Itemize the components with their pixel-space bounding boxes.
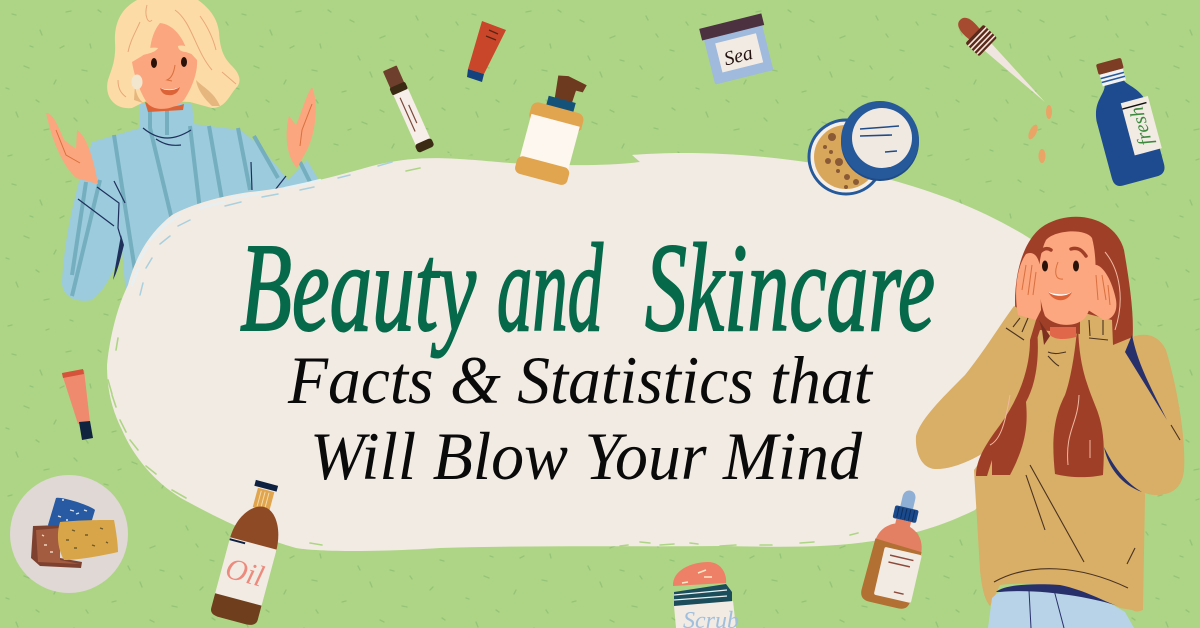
hair shadow [134, 80, 220, 106]
hair back [1015, 217, 1133, 365]
neck [145, 102, 184, 112]
sleeve shadow [113, 235, 124, 280]
hair locks [976, 320, 1038, 476]
earring [132, 74, 142, 90]
illustration: red-haired woman in yellow sweater [916, 217, 1184, 628]
bottle label: fresh [1126, 104, 1157, 148]
icon: peach tube [62, 369, 93, 440]
sweater stripes [72, 106, 312, 296]
left hand on cheek [1016, 253, 1041, 320]
hand lines [56, 104, 312, 163]
icon: dropper bottle [859, 485, 935, 611]
jar label: Sea [722, 42, 755, 70]
mouth [160, 87, 180, 95]
icon: soap bars [10, 475, 128, 593]
icon: red tube [467, 21, 506, 82]
title: Beauty and Skincare: and [497, 219, 604, 358]
hair strands [118, 5, 236, 97]
eyes [1042, 260, 1079, 272]
sweater [62, 104, 320, 320]
illustration: blonde woman in blue sweater [46, 0, 320, 320]
finger lines [1022, 265, 1110, 305]
bangs [130, 45, 197, 62]
title: Beauty and Skincare: Skincare [645, 219, 935, 358]
icon: scrub jar [673, 562, 739, 628]
jeans lines [1029, 590, 1064, 628]
navy arm line [1104, 335, 1167, 492]
icon: brown-capped vial [382, 65, 435, 153]
icon: dropper [951, 11, 1054, 163]
subtitle: Facts & Statistics that Will Blow Your Mind [287, 342, 874, 494]
title: Beauty and Skincare: Beauty [240, 219, 476, 358]
face [132, 23, 197, 109]
waistband [996, 584, 1118, 606]
subtitle: Facts & Statistics that Will Blow Your Mind: Will Blow Your Mind [310, 418, 863, 494]
nose [167, 65, 175, 81]
torso [974, 330, 1145, 612]
right hand on cheek [1087, 265, 1116, 320]
eyes [151, 57, 187, 68]
icon: powder compact [809, 101, 919, 194]
title: Beauty and Skincare [240, 219, 935, 358]
face [1039, 231, 1096, 325]
right arm [1080, 312, 1184, 495]
bottle label: Oil [222, 552, 267, 594]
jeans [988, 586, 1134, 628]
subtitle: Facts & Statistics that Will Blow Your Mind: Facts & Statistics that [287, 342, 874, 418]
right hand [287, 87, 316, 168]
sweater collar [1050, 327, 1076, 339]
left hand [46, 113, 98, 184]
sweater creases [994, 318, 1180, 588]
hair highlights [990, 252, 1120, 465]
left arm [916, 306, 1036, 469]
nose [1056, 262, 1063, 279]
icon: navy fresh bottle [1082, 54, 1169, 188]
eyebrows [1040, 248, 1086, 256]
mouth [1048, 292, 1072, 300]
brush edge texture [108, 153, 858, 548]
hair [107, 0, 239, 108]
sweater creases [78, 128, 286, 245]
blob: cream brush stroke [107, 153, 1060, 551]
icon: Sea jar [699, 13, 775, 85]
icon: pump bottle [514, 69, 594, 186]
icon: oil bottle [209, 477, 293, 627]
